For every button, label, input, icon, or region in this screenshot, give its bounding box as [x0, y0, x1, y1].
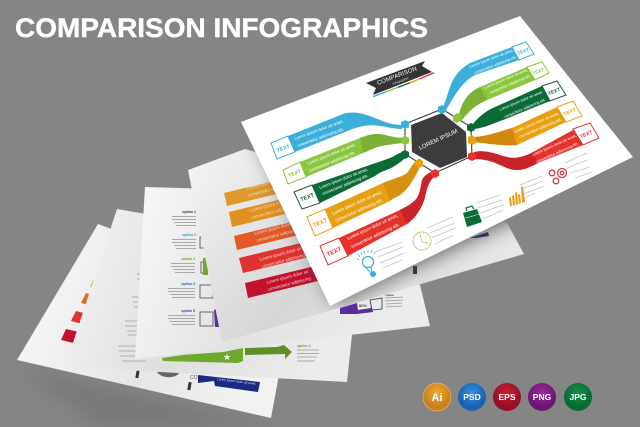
- left ribbon: dark green: Lorem ipsum dolor sit amet,: [319, 167, 369, 190]
- center hexagon: LOREM IPSUM: [418, 129, 459, 152]
- chart text lines: [520, 176, 544, 198]
- sheet 3 option 5: option 5: [181, 309, 195, 313]
- title banner: COMPARISON: [377, 66, 418, 87]
- center hexagon: [411, 113, 467, 168]
- sheet 2 bar labels: Lorem ipsum dolor sit: [266, 269, 310, 285]
- sheet 2 bar labels: Lorem ipsum dolor sit: [246, 175, 290, 191]
- sheet 4: second back page: [65, 209, 352, 382]
- sheet 2 bar labels: consectetur adipiscing: [247, 181, 292, 198]
- sheet 3 purple tab with box: [340, 293, 403, 314]
- left ribbon: orange: Lorem ipsum dolor sit amet,: [331, 189, 383, 216]
- left ribbon: red: TEXT: [326, 246, 343, 258]
- sheet 2 bar labels: Lorem ipsum dolor sit: [254, 220, 298, 236]
- badge: JPG: JPG: [569, 392, 587, 402]
- icon: gears: [549, 168, 566, 184]
- right ribbon: dark green: Lorem ipsum dolor sit amet,: [499, 90, 544, 112]
- sheet 2 bar 2: [229, 178, 372, 227]
- right ribbon: blue: TEXT: [517, 47, 530, 57]
- right ribbon: green: consectetur adipiscing elit.: [489, 74, 531, 95]
- badge: JPG: [564, 383, 592, 411]
- outer hexagon outline: [405, 109, 472, 173]
- left ribbon: blue: [271, 113, 409, 159]
- right ribbon: red: consectetur adipiscing elit.: [535, 141, 579, 164]
- sheet 5 colour tabs: [61, 280, 106, 346]
- sheet 2 bar labels: consectetur adipiscing: [256, 226, 301, 243]
- icon: briefcase: [463, 206, 482, 227]
- sheet 4 green arrow: [162, 345, 292, 363]
- format badges: [423, 383, 592, 411]
- left ribbon: green: TEXT: [287, 168, 303, 179]
- sheet 5: back page: [17, 224, 300, 418]
- sheet 3 option 4: [168, 282, 213, 298]
- sheet 5 dark marks: [135, 370, 198, 390]
- front sheet: [241, 16, 633, 306]
- sheet 2: orange bars page: [188, 149, 524, 342]
- left ribbon: green: [283, 134, 409, 184]
- right ribbon: blue: Lorem ipsum dolor sit amet,: [469, 48, 514, 69]
- right ribbon: orange: consectetur adipiscing elit.: [518, 116, 562, 139]
- sheet 2 bar labels: consectetur adipiscing: [267, 275, 312, 292]
- clock text lines: [427, 217, 455, 244]
- title: COMPARISON INFOGRAPHICS: [15, 13, 428, 43]
- badge: EPS: [493, 383, 521, 411]
- right ribbon: red: Lorem ipsum dolor sit amet,: [531, 133, 577, 157]
- icon: light bulb: [357, 250, 376, 277]
- sheet 2 bar 4: [239, 224, 383, 273]
- sheet 2 bar 3: [234, 202, 377, 250]
- left ribbon: red: Lorem ipsum dolor sit amet,: [346, 213, 399, 241]
- right ribbon: blue: consectetur adipiscing elit.: [474, 55, 517, 75]
- left ribbon: green: consectetur adipiscing elit.: [309, 150, 356, 173]
- sheet 3 option 3: [171, 257, 208, 275]
- sheet 3 purple tab with box: 80%: [359, 303, 367, 308]
- badge: Ai: [423, 383, 451, 411]
- left ribbon: dark green: [294, 150, 409, 209]
- title banner: [366, 61, 434, 98]
- sheet 2 bar labels: [246, 175, 312, 292]
- sheet 3 option 1: [172, 210, 196, 226]
- sheet 5 dark marks: CO: [190, 375, 198, 381]
- right ribbon: red: TEXT: [579, 129, 594, 140]
- sheet 2 bar labels: Lorem ipsum dolor sit: [249, 197, 293, 213]
- badge: PSD: [458, 383, 486, 411]
- left ribbon: dark green: consectetur adipiscing elit.: [322, 173, 369, 196]
- left ribbon: red: consectetur adipiscing elit.: [350, 222, 400, 249]
- right ribbon: dark green: [467, 81, 566, 132]
- sheet 5 blue bar: [198, 375, 260, 392]
- badge: PSD: PSD: [463, 392, 481, 402]
- sheet 5 blue bar: Lorem ipsum dolor sit amet,: [217, 377, 257, 386]
- right ribbon: red: [468, 123, 599, 170]
- right ribbon: green: [453, 62, 549, 123]
- left ribbon: orange: TEXT: [312, 218, 329, 229]
- badge: Ai: Ai: [432, 392, 442, 404]
- title banner: infographic: [392, 76, 410, 86]
- badge: EPS: EPS: [498, 392, 516, 402]
- bulb text lines: [375, 242, 404, 268]
- sheet 2 small marks: [413, 232, 489, 274]
- left ribbon: blue: consectetur adipiscing elit.: [297, 126, 345, 148]
- sheet 3 option 2: [172, 233, 209, 249]
- right ribbon: dark green: TEXT: [547, 87, 561, 97]
- sheet 2 bar labels: consectetur adipiscing: [261, 252, 306, 269]
- sheet 3 option 3: option 3: [181, 257, 195, 261]
- sheet 4 green arrow: ★: [223, 352, 231, 362]
- right ribbon: green: TEXT: [532, 67, 545, 77]
- sheet 4 text column: [118, 274, 146, 361]
- icon: clock: [413, 232, 431, 250]
- sheet 3 option 4: option 4: [181, 282, 195, 286]
- sheet 2 bar labels: consectetur adipiscing: [251, 203, 296, 220]
- left ribbon: blue: TEXT: [276, 143, 291, 154]
- sheet 2 bar 5: [245, 249, 388, 298]
- sheet 4 option text: [297, 344, 319, 361]
- sheet 2 bar labels: Lorem ipsum dolor sit: [259, 246, 303, 262]
- sheet 2 bar 1: [224, 159, 367, 206]
- right ribbon: orange: Lorem ipsum dolor sit amet,: [513, 111, 560, 134]
- sheet 3 option 1: option 1: [182, 210, 196, 214]
- briefcase text lines: [477, 195, 503, 219]
- left ribbon: blue: Lorem ipsum dolor sit amet,: [294, 119, 344, 141]
- right ribbon: orange: [468, 101, 582, 145]
- sheet 3 purple tab with box: option: [385, 293, 394, 297]
- icon: bar chart: [509, 186, 525, 206]
- gears text lines: [565, 153, 592, 178]
- left ribbon: orange: [307, 158, 423, 236]
- sheet 3 option 2: option 2: [182, 233, 196, 237]
- right ribbon: dark green: consectetur adipiscing elit.: [504, 98, 546, 119]
- left ribbon: dark green: TEXT: [300, 192, 316, 203]
- sheet 3: middle page: [135, 187, 430, 359]
- badge: PNG: [528, 383, 556, 411]
- left ribbon: green: Lorem ipsum dolor sit amet,: [307, 142, 356, 166]
- left ribbon: orange: consectetur adipiscing elit.: [334, 197, 383, 223]
- left ribbon: red: [320, 169, 439, 265]
- right ribbon: blue: [438, 42, 534, 114]
- sheet 3 option 5: [168, 308, 219, 327]
- sheet 4 option text: option 2: [297, 344, 311, 348]
- right ribbon: green: Lorem ipsum dolor sit amet,: [484, 68, 529, 90]
- right ribbon: orange: TEXT: [563, 107, 577, 118]
- badge: PNG: PNG: [533, 392, 552, 402]
